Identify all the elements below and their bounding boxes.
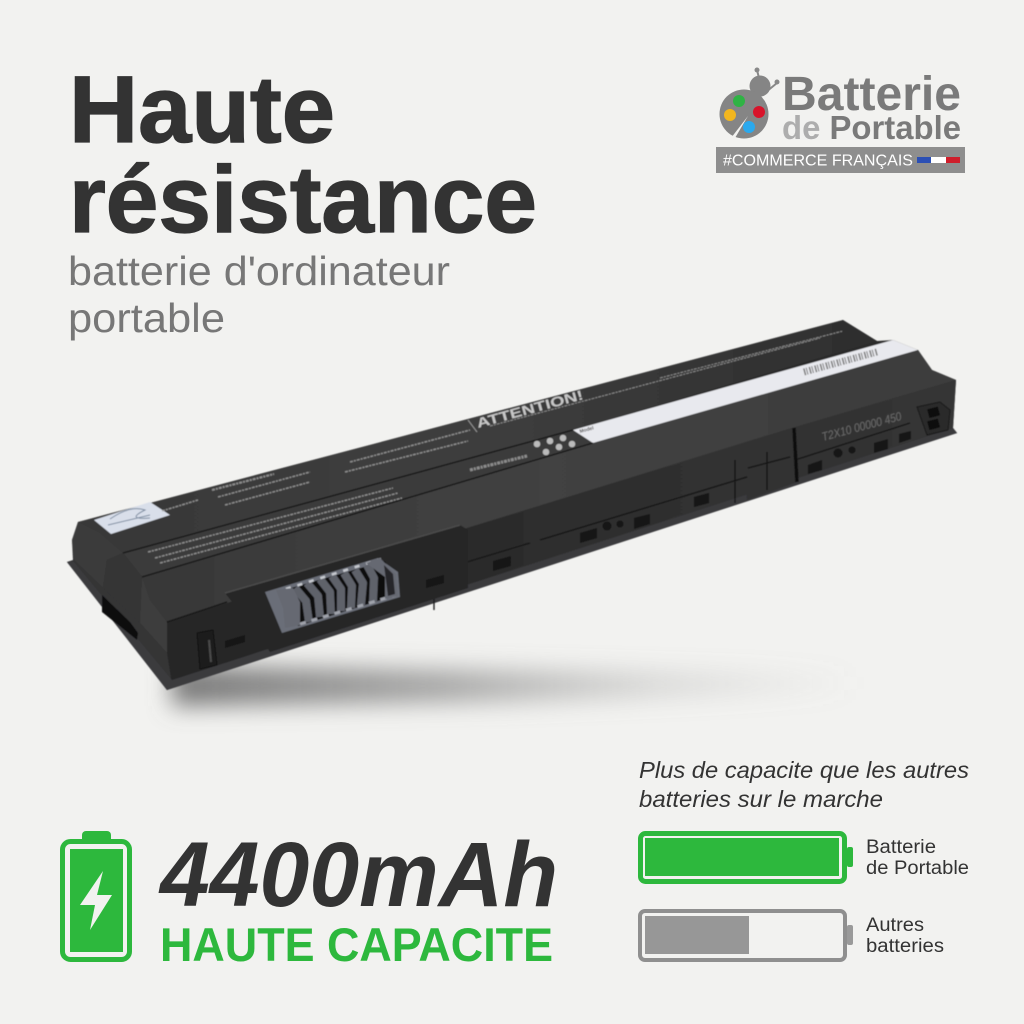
title: Haute — [69, 57, 335, 163]
large end pins — [276, 588, 300, 628]
seam lines — [123, 423, 910, 622]
lower label panel — [123, 430, 593, 577]
end wall — [67, 560, 172, 690]
embossed code: T2X10 00000 450 — [820, 409, 903, 444]
battery photo — [67, 320, 957, 690]
recess top highlight — [225, 525, 460, 593]
mid panel — [743, 427, 797, 500]
battery shadow — [172, 666, 850, 706]
top face — [78, 320, 877, 560]
label: autres batteries — [866, 915, 944, 957]
bevel band — [142, 350, 956, 622]
subtitle: portable — [68, 295, 225, 341]
subtitle — [68, 248, 450, 341]
end bracket — [917, 402, 950, 435]
title: résistance — [69, 147, 537, 253]
icon: palette ladybug — [720, 68, 780, 138]
logo wordmark — [782, 68, 961, 146]
connector pins — [295, 565, 374, 622]
printed text lines — [148, 331, 843, 563]
label: autres batteries: batteries — [866, 936, 944, 957]
pin highlights — [286, 559, 381, 589]
logo wordmark: Batterie — [782, 68, 961, 121]
connector — [265, 558, 400, 633]
comparison heading: batteries sur le marche — [639, 786, 883, 812]
comparison heading: Plus de capacite que les autres — [639, 757, 970, 783]
logo banner: #COMMERCE FRANÇAIS — [723, 152, 913, 170]
icon: lightning bolt — [80, 871, 112, 930]
label: batterie de portable — [866, 837, 969, 879]
front face — [167, 380, 957, 684]
subtitle: batterie d'ordinateur — [68, 248, 450, 294]
logo wordmark: de Portable — [782, 109, 961, 146]
end clip — [197, 630, 217, 669]
sticker left — [94, 502, 170, 534]
front slots — [225, 431, 911, 648]
logo — [716, 68, 965, 173]
comparison: green battery — [640, 834, 853, 882]
end facet — [103, 553, 142, 623]
logo banner — [716, 147, 965, 173]
lower lip — [67, 428, 957, 690]
label: batterie de portable: Batterie — [866, 837, 936, 858]
label: batterie de portable: de Portable — [866, 858, 969, 879]
icon: large green battery — [62, 831, 130, 960]
attention label: ATTENTION! — [475, 387, 585, 431]
battery silhouette — [67, 320, 957, 690]
label small text: Model — [579, 425, 595, 435]
barcode — [804, 352, 877, 372]
warning icons — [534, 435, 575, 455]
white label — [573, 340, 918, 443]
label: autres batteries: Autres — [866, 915, 924, 936]
capacity figure: 4400mAh — [158, 824, 558, 926]
capacity caption: HAUTE CAPACITE — [160, 918, 553, 971]
corner facet — [140, 577, 167, 653]
connector recess — [225, 525, 468, 652]
left end cap — [72, 522, 123, 588]
comparison: grey battery — [640, 911, 853, 960]
title — [69, 57, 537, 253]
end window — [102, 595, 138, 640]
comparison heading — [639, 757, 970, 812]
